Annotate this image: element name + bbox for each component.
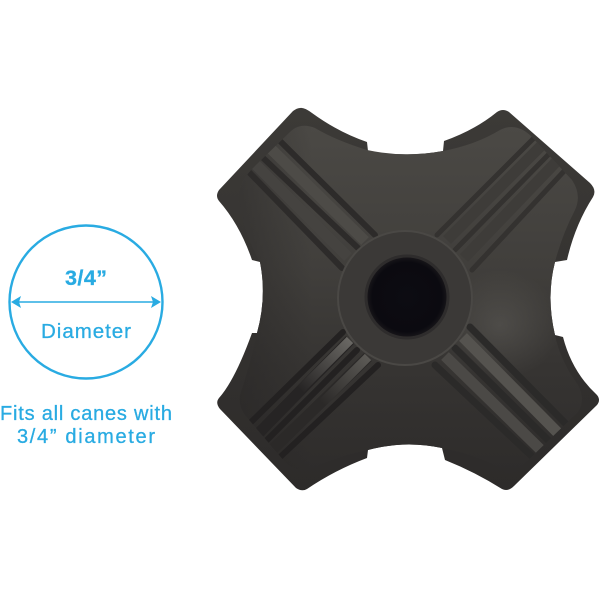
cane socket hole [366,256,448,338]
diameter label: Diameter [41,320,131,343]
inner face [238,126,582,473]
lower-right sheen [466,295,534,358]
shaded left side [238,154,273,332]
diameter arrow [11,296,161,308]
caption: Fits all canes with [0,403,172,425]
ribs: lower right arm [432,324,556,418]
central hub collar [338,231,472,365]
face shading [238,137,566,458]
channel highlights between ribs [253,144,563,455]
product photo: rubber cane tip [217,100,599,500]
diameter circle [10,226,162,378]
caption: 3/4” diameter [17,426,155,448]
channel glints near hub [300,340,368,403]
ribs: lower left arm [245,332,378,460]
panel: diameter diagram [10,226,162,378]
caption [0,403,172,448]
ribs: upper left arm [247,138,375,268]
ribs: upper right arm [437,137,567,270]
measurement value: 3/4” [65,266,107,290]
silhouette with outer rim [217,108,599,490]
infographic canvas [2,108,599,490]
